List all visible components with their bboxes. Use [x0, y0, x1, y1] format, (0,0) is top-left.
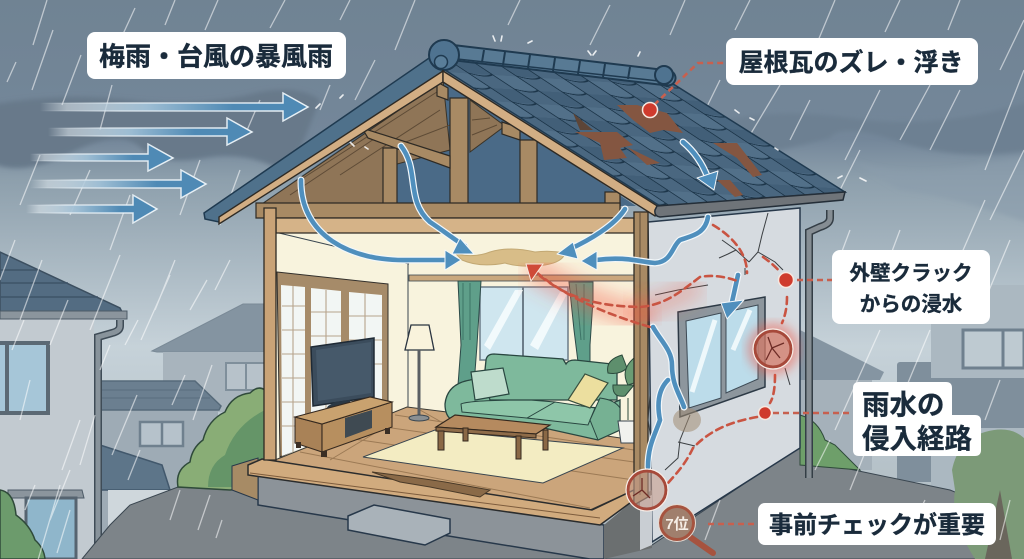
wind arrow 3 — [30, 144, 173, 171]
rotted floorboard — [372, 472, 490, 497]
floor lamp — [405, 325, 434, 421]
background house left — [152, 304, 266, 412]
attic background — [258, 78, 636, 206]
concrete step — [348, 505, 450, 545]
callout dots — [642, 102, 794, 420]
ceiling stain — [456, 249, 565, 266]
red arrow head — [526, 264, 543, 281]
coffee table — [436, 415, 550, 459]
middle neighbouring house — [100, 381, 221, 540]
shoji window — [277, 272, 388, 457]
attic planks — [262, 80, 505, 204]
label: roof tiles — [726, 38, 978, 85]
magnifier icon: 7位 — [665, 516, 689, 533]
tv stand — [295, 397, 392, 457]
label: inspection — [758, 503, 996, 545]
label: intrusion route — [853, 382, 981, 456]
right roof tiles — [445, 56, 845, 206]
attic trusses — [362, 82, 620, 208]
wall window — [678, 297, 765, 417]
wind arrow 1 — [40, 93, 308, 121]
label: roof tiles: 屋根瓦のズレ・浮き — [738, 48, 964, 77]
left roof strip — [204, 56, 448, 222]
slipped tiles — [573, 105, 762, 197]
television — [311, 338, 374, 411]
label: intrusion route: 雨水の — [862, 389, 944, 420]
label: storm: 梅雨・台風の暴風雨 — [99, 42, 333, 72]
rug — [363, 430, 623, 483]
floor — [262, 407, 634, 510]
wind arrows — [26, 93, 308, 223]
timber posts — [264, 208, 648, 505]
magnifier icon — [658, 504, 713, 553]
label: wall crack — [832, 250, 990, 324]
label: inspection: 事前チェックが重要 — [769, 511, 985, 539]
horizontal beams — [256, 203, 634, 233]
water damage stain — [673, 408, 701, 432]
label: wall crack: 外壁クラック — [850, 262, 972, 285]
red leak glow — [530, 268, 700, 320]
blue water paths — [301, 142, 744, 467]
downpipe — [809, 210, 830, 478]
label: storm — [87, 32, 346, 79]
foundation — [258, 475, 604, 559]
callout leaders — [654, 63, 850, 524]
crack circle at base — [626, 469, 668, 511]
wind arrow 4 — [30, 170, 206, 198]
wind arrow 2 — [48, 118, 252, 145]
red dashed leak route — [536, 225, 787, 483]
label: intrusion route: 侵入経路 — [862, 423, 972, 454]
room walls — [276, 233, 634, 463]
deck edge — [248, 459, 634, 525]
green sofa — [445, 354, 620, 440]
back window and curtains — [458, 281, 593, 385]
shrubs — [0, 388, 1024, 559]
wall cracks — [648, 213, 790, 470]
ridge cap — [429, 40, 673, 84]
crack circle on wall — [747, 323, 799, 375]
label: wall crack: からの浸水 — [860, 293, 963, 316]
storm clouds — [0, 90, 1024, 225]
eave and gutter — [655, 192, 845, 217]
potted plant — [608, 355, 634, 443]
exterior side wall — [648, 208, 800, 542]
neighbour house left — [0, 252, 127, 559]
spray specks — [316, 36, 866, 181]
house cutaway — [204, 36, 866, 559]
ground — [82, 448, 1024, 559]
wind arrow 5 — [26, 195, 157, 223]
background house right — [800, 285, 1024, 495]
barge boards — [219, 71, 659, 224]
